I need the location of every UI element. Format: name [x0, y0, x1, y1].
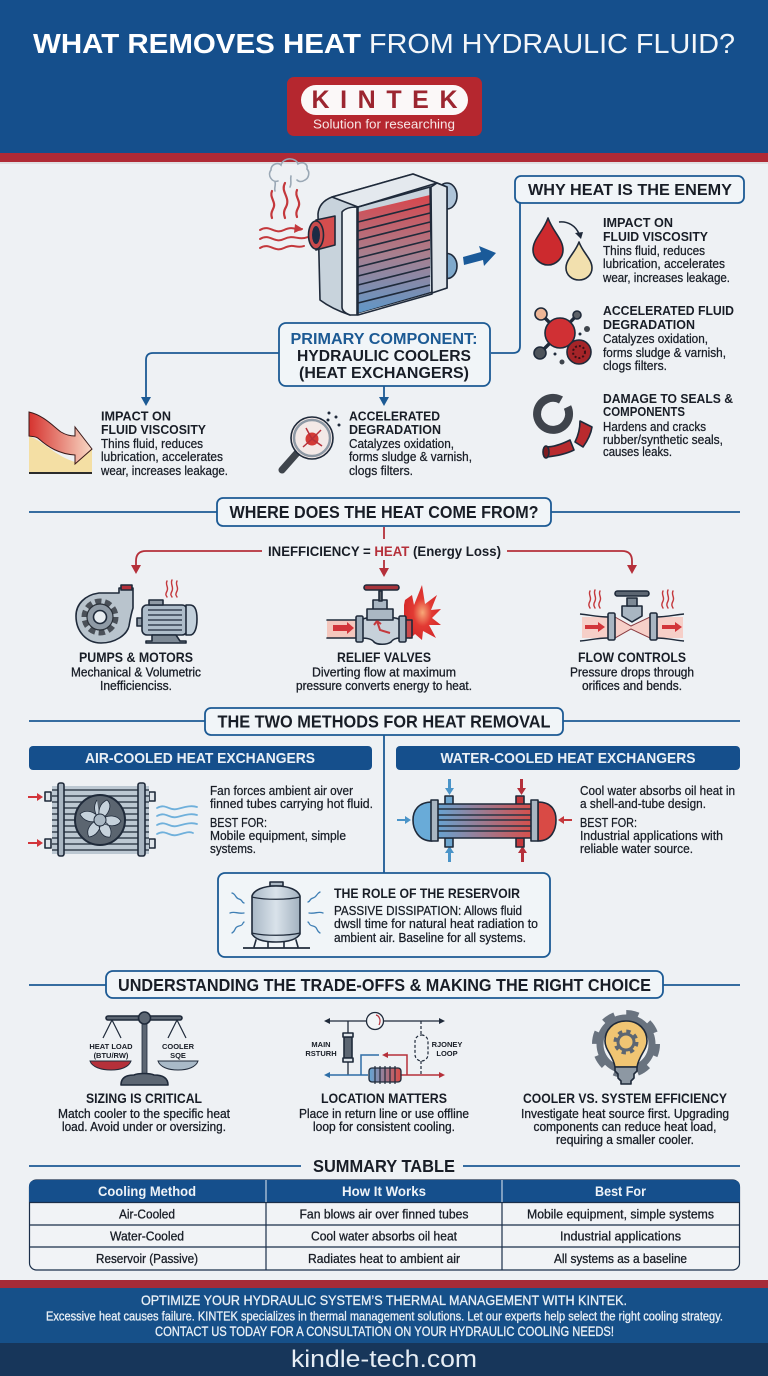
text: relief valves: RELIEF VALVES — [337, 649, 431, 665]
text: air-cooled description: BEST FOR: — [210, 816, 267, 830]
text: relief valves — [296, 649, 472, 693]
logo: KINTEK: Solution for researching — [313, 116, 455, 132]
text: reservoir description: ambient air. Baseline for all systems. — [334, 931, 526, 945]
icon: balance scale: SQE — [170, 1051, 186, 1060]
text: damage to seals and components — [603, 391, 733, 459]
steam cloud — [270, 159, 309, 191]
panel: role of the reservoir — [218, 873, 550, 957]
text: accelerated degradation — [349, 408, 472, 478]
title: WHAT REMOVES HEAT — [33, 28, 361, 59]
text: air-cooled description — [210, 784, 373, 856]
table row: air-cooled — [119, 1206, 714, 1222]
icon: balance scale — [89, 1012, 198, 1085]
footer call to action — [46, 1292, 723, 1339]
inlet port — [316, 216, 335, 250]
icon: balance scale: (BTU/RW) — [94, 1051, 129, 1060]
icon: cooling circuit diagram — [305, 1012, 462, 1084]
section heading: trade-offs: UNDERSTANDING THE TRADE-OFFS & MAKING THE RIGHT CHOICE — [118, 975, 651, 995]
text: reservoir description: PASSIVE DISSIPATION: Allows fluid — [334, 904, 522, 918]
icon: fluid drops — [533, 218, 592, 280]
section heading: two methods — [29, 708, 740, 873]
table header row: Best For — [595, 1183, 646, 1199]
equation: inefficiency equals heat: INEFFICIENCY = HEAT (Energy Loss) — [268, 543, 501, 559]
icon: cooling circuit diagram: RSTURH — [305, 1049, 337, 1058]
footer call to action: CONTACT US TODAY FOR A CONSULTATION ON YOUR HYDRAULIC COOLING NEEDS! — [155, 1324, 614, 1339]
text: location matters: Place in return line or use offline — [299, 1106, 469, 1121]
logo: KINTEK: KINTEK — [312, 86, 458, 114]
text: flow controls — [570, 649, 694, 693]
icon: damaged seal and hose — [537, 398, 592, 458]
banner: air-cooled: AIR-COOLED HEAT EXCHANGERS — [85, 750, 315, 767]
icon: hydraulic cooler — [260, 159, 496, 315]
text: sizing is critical: SIZING IS CRITICAL — [86, 1090, 202, 1106]
text: cooler vs system efficiency: components can reduce heat load, — [534, 1119, 716, 1134]
icon: viscosity curve — [29, 412, 92, 474]
text: flow controls: Pressure drops through — [570, 664, 694, 680]
text: relief valves: pressure converts energy to heat. — [296, 678, 472, 693]
logo: KINTEK — [287, 77, 482, 136]
footer call to action: OPTIMIZE YOUR HYDRAULIC SYSTEM’S THERMAL MANAGEMENT WITH KINTEK. — [141, 1292, 627, 1308]
text: location matters: LOCATION MATTERS — [321, 1090, 447, 1106]
cooler body — [318, 174, 447, 315]
text: impact on fluid viscosity: IMPACT ON — [603, 215, 673, 230]
table row: air-cooled: Mobile equipment, simple systems — [527, 1206, 714, 1222]
section heading: trade-offs — [29, 971, 740, 998]
banner: water-cooled: WATER-COOLED HEAT EXCHANGERS — [440, 750, 696, 767]
text: water-cooled description: BEST FOR: — [580, 816, 637, 830]
table row: reservoir: Radiates heat to ambient air — [308, 1251, 461, 1266]
text: damage to seals and components: rubber/synthetic seals, — [603, 433, 723, 447]
text: reservoir description: dwsll time for natural heat radiation to — [334, 917, 538, 931]
text: location matters: loop for consistent cooling. — [313, 1119, 455, 1134]
text: relief valves: Diverting flow at maximum — [312, 664, 456, 680]
text: left impact on fluid viscosity: wear, increases leakage. — [100, 464, 228, 478]
text: cooler vs system efficiency — [521, 1090, 729, 1147]
icon: air-cooled exchanger — [28, 783, 197, 856]
icon: cooling circuit diagram: RJONEY — [432, 1040, 462, 1049]
text: accelerated degradation: DEGRADATION — [349, 422, 441, 437]
text: accelerated fluid degradation: ACCELERATED FLUID — [603, 303, 734, 318]
title continuation: FROM HYDRAULIC FLUID? — [369, 28, 735, 59]
red distribution arrows — [131, 527, 637, 577]
footer band — [0, 1280, 768, 1376]
text: accelerated fluid degradation — [603, 303, 734, 373]
text: accelerated degradation: forms sludge & varnish, — [349, 450, 472, 464]
callout: primary component: HYDRAULIC COOLERS — [297, 348, 471, 365]
text: left impact on fluid viscosity: lubrication, accelerates — [101, 450, 223, 464]
text: sizing is critical: Match cooler to the specific heat — [58, 1106, 230, 1121]
text: air-cooled description: Fan forces ambient air over — [210, 784, 353, 798]
text: impact on fluid viscosity — [602, 215, 730, 285]
text: air-cooled description: Mobile equipment, simple — [210, 829, 346, 843]
text: accelerated degradation: ACCELERATED — [349, 408, 440, 424]
text: air-cooled description: finned tubes carrying hot fluid. — [210, 797, 373, 811]
icon: magnifier with contaminants — [282, 412, 340, 470]
banner: air-cooled — [29, 746, 372, 770]
icon: water-cooled shell and tube exchanger — [397, 779, 572, 862]
banner: water-cooled — [396, 746, 740, 770]
table row: reservoir — [96, 1251, 687, 1266]
table row: air-cooled: Air-Cooled — [119, 1206, 175, 1222]
table header row: How It Works — [342, 1183, 426, 1199]
text: left impact on fluid viscosity — [100, 408, 228, 478]
text: reservoir description: THE ROLE OF THE RESERVOIR — [334, 885, 520, 901]
connector arrows from primary component — [141, 353, 389, 406]
heading: why heat is the enemy: WHY HEAT IS THE ENEMY — [528, 182, 732, 199]
text: accelerated fluid degradation: forms sludge & varnish, — [603, 346, 726, 360]
callout: primary component: (HEAT EXCHANGERS) — [299, 365, 469, 382]
text: water-cooled description — [580, 784, 735, 856]
text: water-cooled description: Cool water absorbs oil heat in — [580, 784, 735, 798]
callout: primary component — [279, 323, 490, 386]
heat waves — [271, 183, 299, 218]
text: accelerated degradation: Catalyzes oxidation, — [349, 437, 454, 451]
text: cooler vs system efficiency: requiring a smaller cooler. — [556, 1132, 694, 1147]
callout: primary component: PRIMARY COMPONENT: — [290, 331, 478, 348]
text: impact on fluid viscosity: FLUID VISCOSITY — [603, 229, 708, 244]
text: pumps and motors — [71, 649, 201, 693]
outlet arrow — [463, 246, 496, 266]
text: damage to seals and components: COMPONENTS — [603, 404, 685, 419]
heat exchanger fins — [358, 195, 430, 313]
text: left impact on fluid viscosity: IMPACT ON — [101, 408, 171, 424]
text: water-cooled description: Industrial applications with — [580, 829, 723, 843]
text: sizing is critical — [58, 1090, 230, 1134]
rear ports — [437, 183, 457, 209]
section heading: two methods: THE TWO METHODS FOR HEAT REMOVAL — [218, 712, 551, 732]
table row: water-cooled — [110, 1228, 681, 1244]
text: damage to seals and components: DAMAGE TO SEALS & — [603, 391, 733, 406]
text: location matters — [299, 1090, 469, 1134]
text: cooler vs system efficiency: Investigate heat source first. Upgrading — [521, 1106, 729, 1121]
header band — [0, 0, 768, 164]
text: pumps and motors: PUMPS & MOTORS — [79, 649, 193, 665]
table header row: Cooling Method — [98, 1183, 196, 1199]
text: impact on fluid viscosity: lubrication, accelerates — [603, 257, 725, 271]
text: cooler vs system efficiency: COOLER VS. SYSTEM EFFICIENCY — [523, 1090, 728, 1106]
icon: cooling circuit diagram: LOOP — [436, 1049, 458, 1058]
text: damage to seals and components: Hardens and cracks — [603, 420, 706, 434]
text: accelerated fluid degradation: Catalyzes oxidation, — [603, 332, 708, 346]
website url: kindle-tech.com — [291, 1346, 477, 1373]
text: sizing is critical: load. Avoid under or oversizing. — [62, 1119, 226, 1134]
icon: reservoir tank — [230, 882, 323, 948]
heading: summary table: SUMMARY TABLE — [313, 1156, 455, 1176]
table row: water-cooled: Cool water absorbs oil heat — [311, 1228, 457, 1244]
icon: molecule — [534, 308, 591, 364]
text: water-cooled description: reliable water source. — [580, 842, 693, 856]
table header row — [98, 1183, 646, 1199]
icon: balance scale: COOLER — [162, 1042, 195, 1051]
text: pumps and motors: Inefficienciss. — [100, 678, 172, 693]
table row: water-cooled: Industrial applications — [560, 1228, 681, 1244]
table row: water-cooled: Water-Cooled — [110, 1228, 184, 1244]
icon: pump and motor — [76, 580, 197, 643]
icon: balance scale: HEAT LOAD — [89, 1042, 133, 1051]
icon: gear and light bulb — [597, 1015, 655, 1084]
text: accelerated degradation: clogs filters. — [349, 464, 413, 478]
text: accelerated fluid degradation: DEGRADATION — [603, 317, 695, 332]
table row: reservoir: Reservoir (Passive) — [96, 1251, 198, 1266]
icon: relief valve — [327, 585, 441, 644]
heading: why heat is the enemy — [491, 176, 744, 353]
text: accelerated fluid degradation: clogs filters. — [603, 359, 667, 373]
text: flow controls: orifices and bends. — [582, 678, 682, 693]
table row: air-cooled: Fan blows air over finned tubes — [300, 1206, 469, 1222]
section heading: where does the heat come from — [29, 498, 740, 526]
section heading: where does the heat come from: WHERE DOES THE HEAT COME FROM? — [230, 502, 538, 522]
text: pumps and motors: Mechanical & Volumetric — [71, 664, 201, 680]
text: water-cooled description: a shell-and-tube design. — [580, 797, 706, 811]
text: impact on fluid viscosity: wear, increases leakage. — [602, 271, 730, 285]
summary table — [29, 1180, 740, 1270]
text: flow controls: FLOW CONTROLS — [578, 649, 686, 665]
text: left impact on fluid viscosity: Thins fluid, reduces — [101, 437, 203, 451]
icon: cooling circuit diagram: MAIN — [311, 1040, 331, 1049]
table row: reservoir: All systems as a baseline — [554, 1251, 687, 1266]
text: damage to seals and components: causes leaks. — [603, 445, 672, 459]
text: air-cooled description: systems. — [210, 842, 256, 856]
text: reservoir description — [334, 885, 538, 945]
icon: flow control valve — [580, 590, 684, 641]
text: left impact on fluid viscosity: FLUID VISCOSITY — [101, 422, 206, 437]
text: impact on fluid viscosity: Thins fluid, reduces — [603, 244, 705, 258]
